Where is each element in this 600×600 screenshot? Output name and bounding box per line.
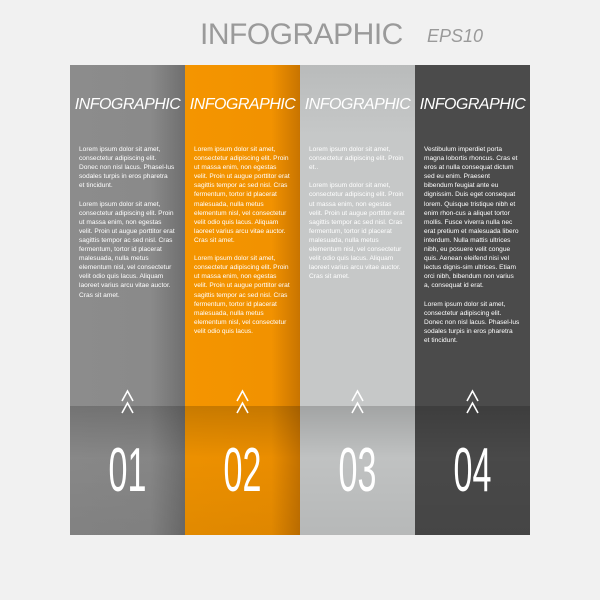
- fold shadow band: [70, 406, 530, 535]
- number 03: 03: [339, 436, 376, 505]
- panel: column 2: [185, 65, 300, 535]
- text 2: [194, 146, 290, 335]
- heading 2: INFOGRAPHIC: [190, 96, 295, 113]
- panel: column 1: [70, 65, 185, 535]
- number 04: 04: [454, 436, 491, 505]
- chevron 1: [121, 390, 134, 414]
- title: INFOGRAPHIC: [200, 18, 403, 51]
- text 1: [79, 146, 175, 298]
- text 1: Lorem ipsum dolor sit amet, consectetur adipiscing elit. Donec non nisl lacus. Phasel-lus sodales turpis in eros pharetra et tincidunt.: [79, 146, 174, 189]
- chevrons and numbers: [109, 390, 491, 505]
- panel: column 4: [415, 65, 530, 535]
- panel: column 3: [300, 65, 415, 535]
- subtitle: EPS10: EPS10: [427, 26, 483, 46]
- text 3: Lorem ipsum dolor sit amet, consectetur adipiscing elit. Proin et..: [309, 146, 404, 171]
- number 02: 02: [224, 436, 261, 505]
- chevron 2: [236, 390, 249, 414]
- text 3: Lorem ipsum dolor sit amet, consectetur adipiscing elit. Proin ut massa enim, non egestas velit. Proin ut augue porttitor erat sagittis tempor ac sed nisl. Cras fermentum, tortor id placerat malesuada, nulla metus elementum nisl, vel consectetur velit odio quis lacus. Aliquam laoreet varius arcu vitae auctor. Cras sit amet.: [309, 182, 405, 280]
- chevron 3: [351, 390, 364, 414]
- heading 3: INFOGRAPHIC: [305, 96, 410, 113]
- heading 4: INFOGRAPHIC: [420, 96, 525, 113]
- text 2: Lorem ipsum dolor sit amet, consectetur adipiscing elit. Proin ut massa enim, non egestas velit. Proin ut augue porttitor erat sagittis tempor ac sed nisl. Cras fermentum, tortor id placerat malesuada, nulla metus elementum nisl, vel consectetur velit odio quis lacus.: [194, 255, 290, 335]
- text 2: Lorem ipsum dolor sit amet, consectetur adipiscing elit. Proin ut massa enim, non egestas velit. Proin ut augue porttitor erat sagittis tempor ac sed nisl. Cras fermentum, tortor id placerat malesuada, nulla metus elementum nisl, vel consectetur velit odio quis lacus. Aliquam laoreet varius arcu vitae auctor. Cras sit amet.: [194, 146, 290, 244]
- number 01: 01: [109, 436, 146, 505]
- text 4: Lorem ipsum dolor sit amet, consectetur adipiscing elit. Donec non nisl lacus. Phasel-lus sodales turpis in eros pharetra et tincidunt.: [424, 301, 519, 344]
- text 4: Vestibulum imperdiet porta magna lobortis rhoncus. Cras et eros at nulla consequat dictum sed eu enim. Praesent bibendum feugiat ante eu dignissim. Duis eget consequat lorem. Quisque tristique nibh et enim rhon-cus a aliquet tortor mollis. Fusce viverra nulla nec erat pretium et malesuada libero interdum. Nulla mattis ultrices nibh, eu posuere velit congue quis. Aenean eleifend nisi vel lectus dignis-sim ultrices. Etiam orci nibh, bibendum non varius a, consequat id erat.: [424, 146, 519, 289]
- heading 1: INFOGRAPHIC: [75, 96, 180, 113]
- text 1: Lorem ipsum dolor sit amet, consectetur adipiscing elit. Proin ut massa enim, non egestas velit. Proin ut augue porttitor erat sagittis tempor ac sed nisl. Cras fermentum, tortor id placerat malesuada, nulla metus elementum nisl, vel consectetur velit odio quis lacus. Aliquam laoreet varius arcu vitae auctor. Cras sit amet.: [79, 201, 175, 298]
- chevron 4: [466, 390, 479, 414]
